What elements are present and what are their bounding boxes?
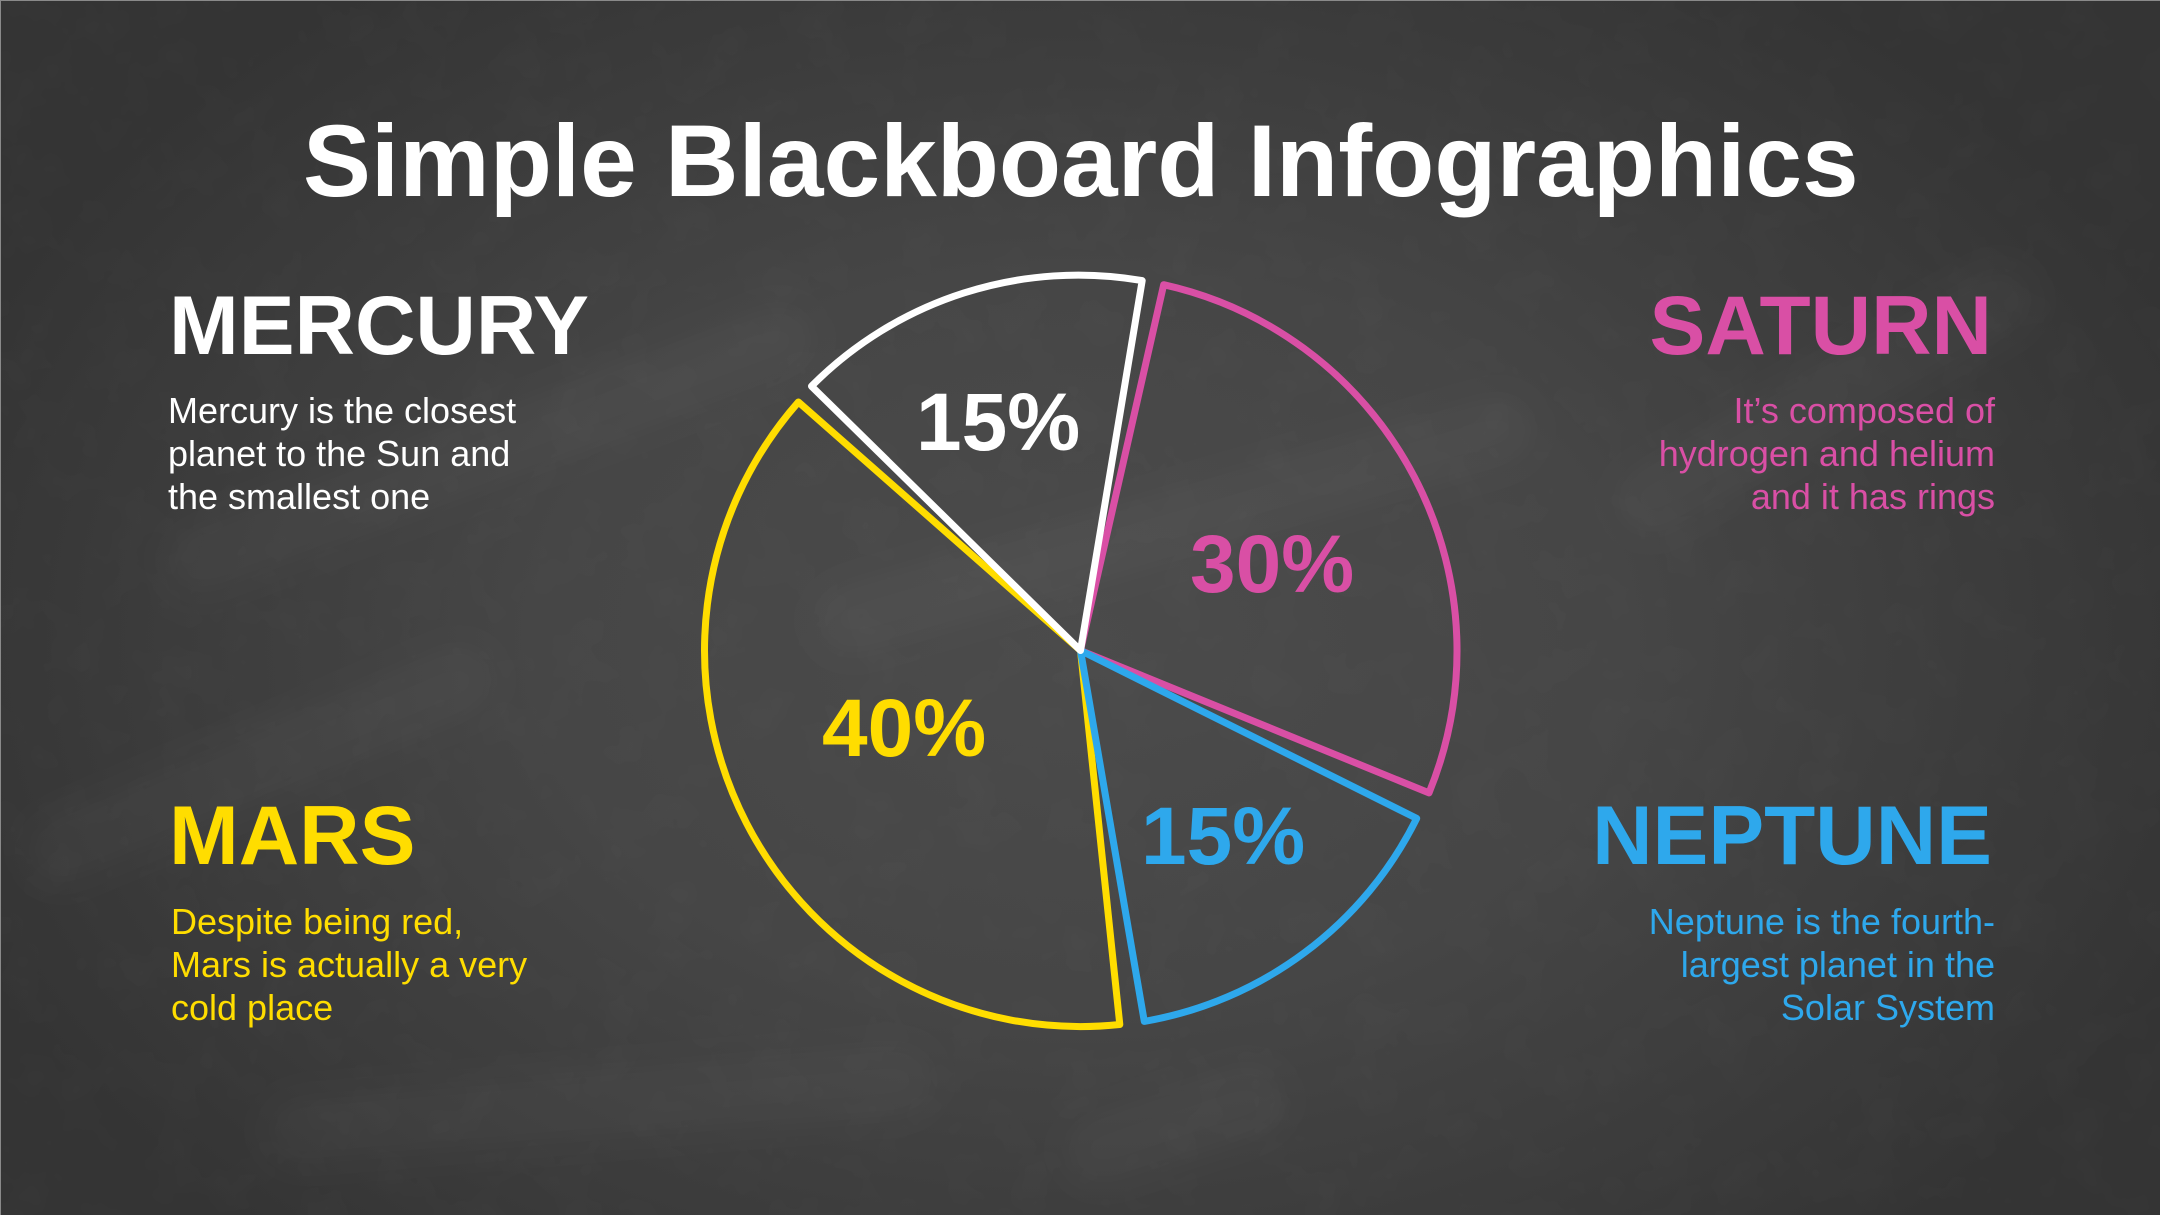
label: Mercury 15%: 15%	[916, 377, 1080, 468]
text block: Mercury description: Mercury is the closest	[168, 390, 516, 431]
text block: Neptune description: largest planet in the	[1681, 944, 1995, 985]
title: Simple Blackboard Infographics	[303, 104, 1859, 218]
text block: Saturn description: and it has rings	[1751, 476, 1995, 517]
text block: Mercury description	[168, 390, 516, 517]
text block: Mars description: Despite being red,	[171, 901, 463, 942]
slice: Mercury 15%	[812, 275, 1142, 650]
slice: Mars 40%	[705, 402, 1120, 1027]
heading: Saturn: SATURN	[1650, 278, 1992, 372]
text block: Mars description	[171, 901, 527, 1028]
panel: Mars	[169, 788, 527, 1028]
text block: Neptune description	[1649, 901, 1995, 1028]
label: Mars 40%: 40%	[822, 683, 986, 774]
label: Neptune 15%: 15%	[1141, 791, 1305, 882]
text block: Mars description: Mars is actually a very	[171, 944, 527, 985]
pie chart	[705, 275, 1457, 1027]
text block: Neptune description: Solar System	[1781, 987, 1995, 1028]
panel: Neptune	[1592, 788, 1995, 1028]
text block: Saturn description	[1659, 390, 1996, 517]
panel: Mercury	[168, 278, 589, 517]
slice: Neptune 15%	[1080, 650, 1417, 1021]
panel: Saturn	[1650, 278, 1996, 517]
slice: Saturn 30%	[1080, 285, 1457, 793]
text block: Mercury description: the smallest one	[168, 476, 430, 517]
text block: Mars description: cold place	[171, 987, 333, 1028]
text block: Saturn description: hydrogen and helium	[1659, 433, 1995, 474]
text block: Saturn description: It’s composed of	[1734, 390, 1996, 431]
heading: Neptune: NEPTUNE	[1592, 788, 1992, 882]
label: Saturn 30%: 30%	[1190, 519, 1354, 610]
text block: Mercury description: planet to the Sun and	[168, 433, 510, 474]
text block: Neptune description: Neptune is the fourth-	[1649, 901, 1995, 942]
heading: Mars: MARS	[169, 788, 415, 882]
heading: Mercury: MERCURY	[169, 278, 589, 372]
